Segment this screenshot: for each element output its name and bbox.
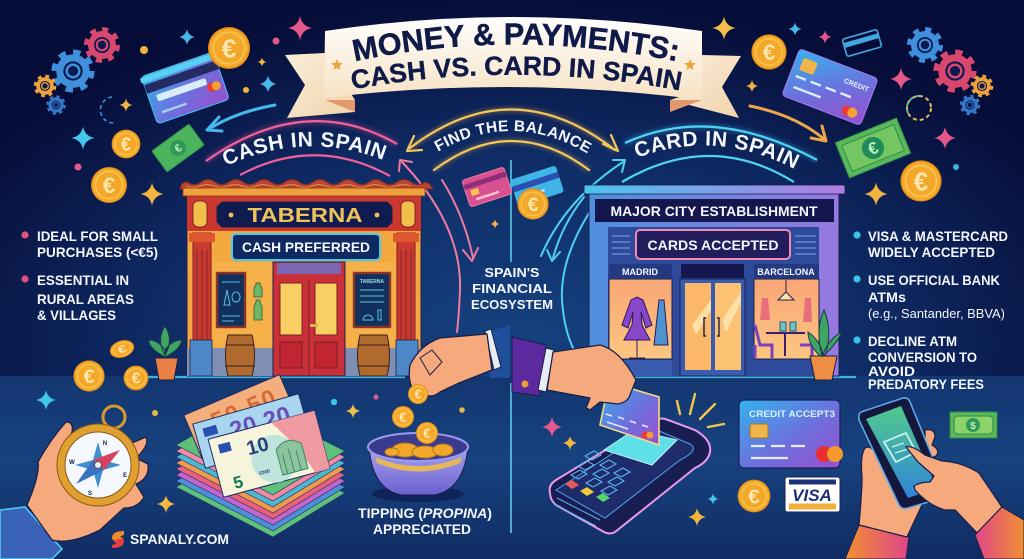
card heading text: CARD IN SPAIN xyxy=(634,131,800,168)
brand name: SPANALY.COM xyxy=(130,531,229,547)
function keys xyxy=(565,480,610,502)
icon: coin top left xyxy=(208,27,250,69)
bullet 3 xyxy=(853,333,984,392)
banner stars xyxy=(331,59,696,70)
icon: coin mid left: € xyxy=(121,134,131,154)
left hand fingers behind phone xyxy=(925,430,938,460)
shopfront inner xyxy=(608,227,819,376)
bullet 2: RURAL AREAS xyxy=(37,291,134,307)
cornice xyxy=(183,188,425,196)
hand xyxy=(409,334,492,396)
icon: pink card xyxy=(462,167,512,207)
icon: green banknote right xyxy=(835,118,911,178)
building frame xyxy=(589,193,839,376)
icon: logo mark xyxy=(112,531,124,548)
roof tile highlight xyxy=(186,184,410,188)
icon: coins near plant: € xyxy=(132,371,141,388)
establishment sign xyxy=(595,199,834,222)
compass needle xyxy=(75,442,121,488)
spain's financial ecosystem label: FINANCIAL xyxy=(472,281,552,296)
20 euro note: 20 20 xyxy=(227,401,294,444)
icon: blue card xyxy=(510,165,564,207)
brand logo xyxy=(112,531,229,548)
50 euro note: 50 50 xyxy=(207,384,280,436)
icon: coin by visa xyxy=(738,480,770,512)
cash in spain heading xyxy=(203,116,400,177)
wall base xyxy=(187,348,421,376)
icon: dollar note: $ xyxy=(970,421,976,432)
ribbon tail right xyxy=(670,55,741,118)
coin above bowl: € xyxy=(423,426,431,441)
compass ring xyxy=(103,406,125,428)
note stack layers xyxy=(176,403,345,537)
held coin: € xyxy=(415,388,422,402)
compass face xyxy=(65,432,131,498)
bullet 2 xyxy=(21,272,134,323)
green bottles xyxy=(254,283,262,320)
base strip xyxy=(609,360,672,376)
compass letters: W xyxy=(69,460,75,466)
icon: centre coin: € xyxy=(528,194,539,216)
blue arcs xyxy=(541,160,625,350)
window labels: MADRID xyxy=(622,267,658,277)
phone xyxy=(859,398,946,509)
bowl body xyxy=(369,446,468,495)
icon: credit card right xyxy=(782,49,878,125)
icon: coins near plant: € xyxy=(84,366,95,388)
icon: credit card left xyxy=(139,52,229,125)
bullet 2: ESSENTIAL IN xyxy=(37,272,129,288)
ribbon tail left xyxy=(285,53,355,118)
sleeve xyxy=(512,337,546,396)
card body xyxy=(739,400,840,468)
right column xyxy=(393,201,419,376)
glass door xyxy=(680,279,745,376)
mastercard logo xyxy=(816,446,843,462)
find the balance label: FIND THE BALANCE xyxy=(434,120,592,154)
sparkle xyxy=(490,220,500,228)
cash preferred sign xyxy=(232,234,380,260)
spain's financial ecosystem label: ECOSYSTEM xyxy=(471,297,553,312)
awning stripes xyxy=(612,236,816,254)
wine barrels xyxy=(225,335,390,376)
bullet 1 xyxy=(21,228,158,260)
bullet 1: IDEAL FOR SMALL xyxy=(37,228,158,244)
centre divider line xyxy=(510,160,512,533)
icon: left plant xyxy=(149,326,182,380)
bowl stripe xyxy=(375,457,462,472)
hand with card xyxy=(512,337,724,445)
credit accepted card xyxy=(739,400,843,468)
sparkles and dots left xyxy=(72,16,312,206)
right shop window xyxy=(754,279,819,359)
chip xyxy=(750,424,768,438)
bullet 1: VISA & MASTERCARD xyxy=(868,228,1008,244)
card on terminal xyxy=(600,382,659,445)
roof tiles xyxy=(180,180,433,189)
20 euro note xyxy=(193,394,311,468)
icon: outline card xyxy=(842,29,882,57)
pink arcs xyxy=(399,160,478,332)
title text line 1: MONEY & PAYMENTS: xyxy=(352,23,678,62)
hand dropping coin xyxy=(408,325,510,404)
spain's financial ecosystem label: SPAIN'S xyxy=(484,265,540,280)
left column xyxy=(189,201,215,376)
bullet 2 xyxy=(853,272,1005,321)
compass letters xyxy=(69,441,127,497)
keypad xyxy=(571,451,630,495)
compass letters: S xyxy=(88,491,92,497)
centre mini cards and coin xyxy=(462,165,564,228)
bullet 3: CONVERSION TO xyxy=(868,349,977,365)
cards accepted sign: CARDS ACCEPTED xyxy=(648,237,778,253)
left shop window xyxy=(609,279,672,359)
left hand xyxy=(859,447,922,537)
top-right icon cluster xyxy=(712,16,992,206)
screen xyxy=(604,430,677,465)
cash heading text: CASH IN SPAIN xyxy=(223,132,387,164)
title text line 2: CASH VS. CARD IN SPAIN xyxy=(352,56,682,90)
door xyxy=(273,262,345,376)
icon: coin top right xyxy=(751,34,787,70)
bullet 3: DECLINE ATM xyxy=(868,333,957,349)
panel: major city establishment xyxy=(584,185,845,376)
sleeve xyxy=(489,325,510,378)
tipping label: TIPPING (PROPINA) xyxy=(358,505,492,521)
red fascia xyxy=(187,195,421,231)
50 euro note xyxy=(184,375,298,459)
right menu board: TABERNA xyxy=(360,279,384,285)
visa card: VISA xyxy=(792,486,832,505)
coin above rim: € xyxy=(399,410,407,425)
bullet 1: PURCHASES (<€5) xyxy=(37,244,158,260)
sleeve xyxy=(0,507,62,559)
icon: coin mid left xyxy=(112,130,140,158)
cash preferred sign: CASH PREFERRED xyxy=(242,239,370,255)
upper window band xyxy=(213,262,395,348)
icon: coin by visa: € xyxy=(748,485,760,508)
10 euro note: €000 xyxy=(259,468,271,477)
bullet 3: PREDATORY FEES xyxy=(868,376,984,392)
tipping label xyxy=(358,505,492,537)
icon: coin right: € xyxy=(914,168,928,196)
icon: green banknote right: € xyxy=(865,138,882,159)
establishment sign: MAJOR CITY ESTABLISHMENT xyxy=(610,203,818,219)
panel: taberna building xyxy=(180,180,433,376)
contactless rays xyxy=(677,394,724,427)
left sleeve xyxy=(845,525,909,559)
card lines xyxy=(751,446,805,458)
window labels: BARCELONA xyxy=(757,267,815,277)
cash bullet list xyxy=(21,228,158,323)
top-left icon cluster xyxy=(35,16,312,206)
phone in hands xyxy=(845,398,1024,559)
cuff xyxy=(485,329,501,370)
taberna sign xyxy=(217,202,392,227)
icon: coin right xyxy=(900,160,942,202)
dashed ring xyxy=(907,96,931,120)
card bullet list xyxy=(853,228,1008,392)
bullet 1 xyxy=(853,228,1008,260)
hand xyxy=(27,422,148,541)
bowl base shadow xyxy=(372,486,464,502)
icon: gears right xyxy=(909,29,992,114)
roof bar xyxy=(584,185,845,194)
icon: dollar note xyxy=(950,412,997,438)
sparkles lower band xyxy=(36,390,718,526)
compass in hand xyxy=(0,406,148,559)
cards accepted sign xyxy=(636,230,790,259)
floor line xyxy=(148,376,856,378)
terminal face xyxy=(556,428,693,518)
gold arcs glow xyxy=(410,109,615,170)
right sleeve xyxy=(975,507,1024,559)
taberna sign: TABERNA xyxy=(248,205,362,227)
spain's financial ecosystem label xyxy=(471,265,553,312)
cuff xyxy=(538,348,554,392)
icon: green banknote left xyxy=(152,124,204,172)
bullet 2: & VILLAGES xyxy=(37,307,116,323)
pos terminal xyxy=(550,418,710,534)
wall xyxy=(187,195,421,376)
bullet 2: (e.g., Santander, BBVA) xyxy=(868,306,1005,321)
title banner xyxy=(285,17,741,118)
right hand xyxy=(906,447,1002,533)
find the balance arrows xyxy=(406,104,620,174)
coins in bowl xyxy=(385,443,453,458)
icon: coin top left: € xyxy=(222,33,237,63)
10 euro note: 10 xyxy=(244,433,271,460)
icon: green banknote left: € xyxy=(173,142,185,155)
sparkles right xyxy=(712,16,959,206)
compass case xyxy=(57,424,139,506)
terminal body xyxy=(550,418,710,534)
compass letters: E xyxy=(123,473,127,479)
icon: right plant xyxy=(808,310,842,380)
compass letters: N xyxy=(103,441,107,447)
left menu board xyxy=(217,273,245,327)
blue arcs xyxy=(622,127,817,182)
10 euro note: 5 xyxy=(231,472,245,493)
bullet 2: ATMs xyxy=(868,289,906,305)
icon: coin lower left: € xyxy=(103,173,116,198)
icon: coins near plant: € xyxy=(116,342,129,356)
bullet 1: WIDELY ACCEPTED xyxy=(868,244,995,260)
icon: coin top right: € xyxy=(763,40,775,65)
window labels xyxy=(609,264,819,278)
tipping label: APPRECIATED xyxy=(373,521,471,537)
visa card xyxy=(785,477,840,512)
icon: gears left xyxy=(35,29,118,114)
arrow: orange to card xyxy=(750,106,826,141)
10 euro note xyxy=(208,411,330,497)
bullet 3: AVOID xyxy=(868,363,915,379)
bowl rim xyxy=(368,433,468,461)
arrow: blue to card xyxy=(207,105,275,131)
right menu board xyxy=(354,273,390,327)
neon arcs: ecosystem flows xyxy=(399,160,625,350)
euro banknotes stack xyxy=(176,375,345,537)
terminal vents xyxy=(554,498,600,526)
icon: credit card right: CREDIT xyxy=(843,78,870,94)
pink arcs xyxy=(206,121,397,176)
tipping bowl xyxy=(368,406,468,502)
bullet 2: USE OFFICIAL BANK xyxy=(868,272,1000,288)
floor band xyxy=(0,376,1024,559)
card title: CREDIT ACCEPT3 xyxy=(749,409,835,420)
hand xyxy=(547,345,636,410)
banner body xyxy=(324,17,702,100)
card in spain heading xyxy=(622,122,819,183)
icon: coin lower left xyxy=(91,167,127,203)
gold arcs xyxy=(407,109,618,170)
icon: coins near plant xyxy=(73,337,148,392)
